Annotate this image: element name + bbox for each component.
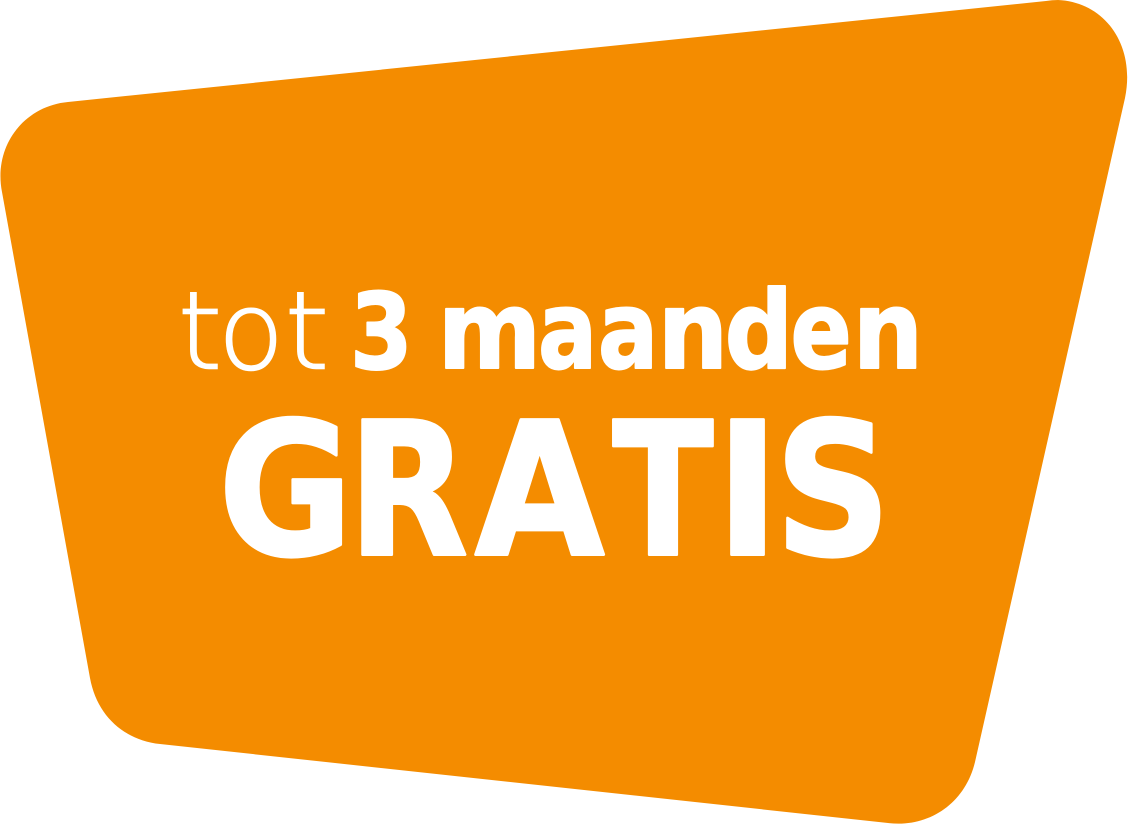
text: GRATIS: A xyxy=(475,383,605,598)
text: 3 maanden: n xyxy=(853,269,923,394)
text: 3 maanden: n xyxy=(658,269,728,394)
text: 3 maanden: e xyxy=(790,269,852,394)
text: GRATIS: G xyxy=(218,384,353,599)
text: 3 maanden: m xyxy=(438,269,541,394)
text: GRATIS: R xyxy=(348,384,468,599)
text: 3 maanden: 3 xyxy=(350,272,413,394)
text: tot 3 maanden xyxy=(178,268,923,395)
text: tot: o xyxy=(218,270,284,394)
text: 3 maanden: a xyxy=(538,269,597,394)
text: tot xyxy=(178,269,329,395)
text: GRATIS: T xyxy=(612,383,713,599)
text: GRATIS xyxy=(218,383,891,599)
text: 3 maanden: d xyxy=(725,268,793,394)
text: GRATIS: I xyxy=(716,383,779,598)
text: tot: t xyxy=(178,269,222,395)
text: GRATIS: S xyxy=(775,383,891,598)
text: 3 maanden xyxy=(350,268,923,394)
text: tot: t xyxy=(285,269,329,395)
text: 3 maanden: a xyxy=(598,269,658,394)
